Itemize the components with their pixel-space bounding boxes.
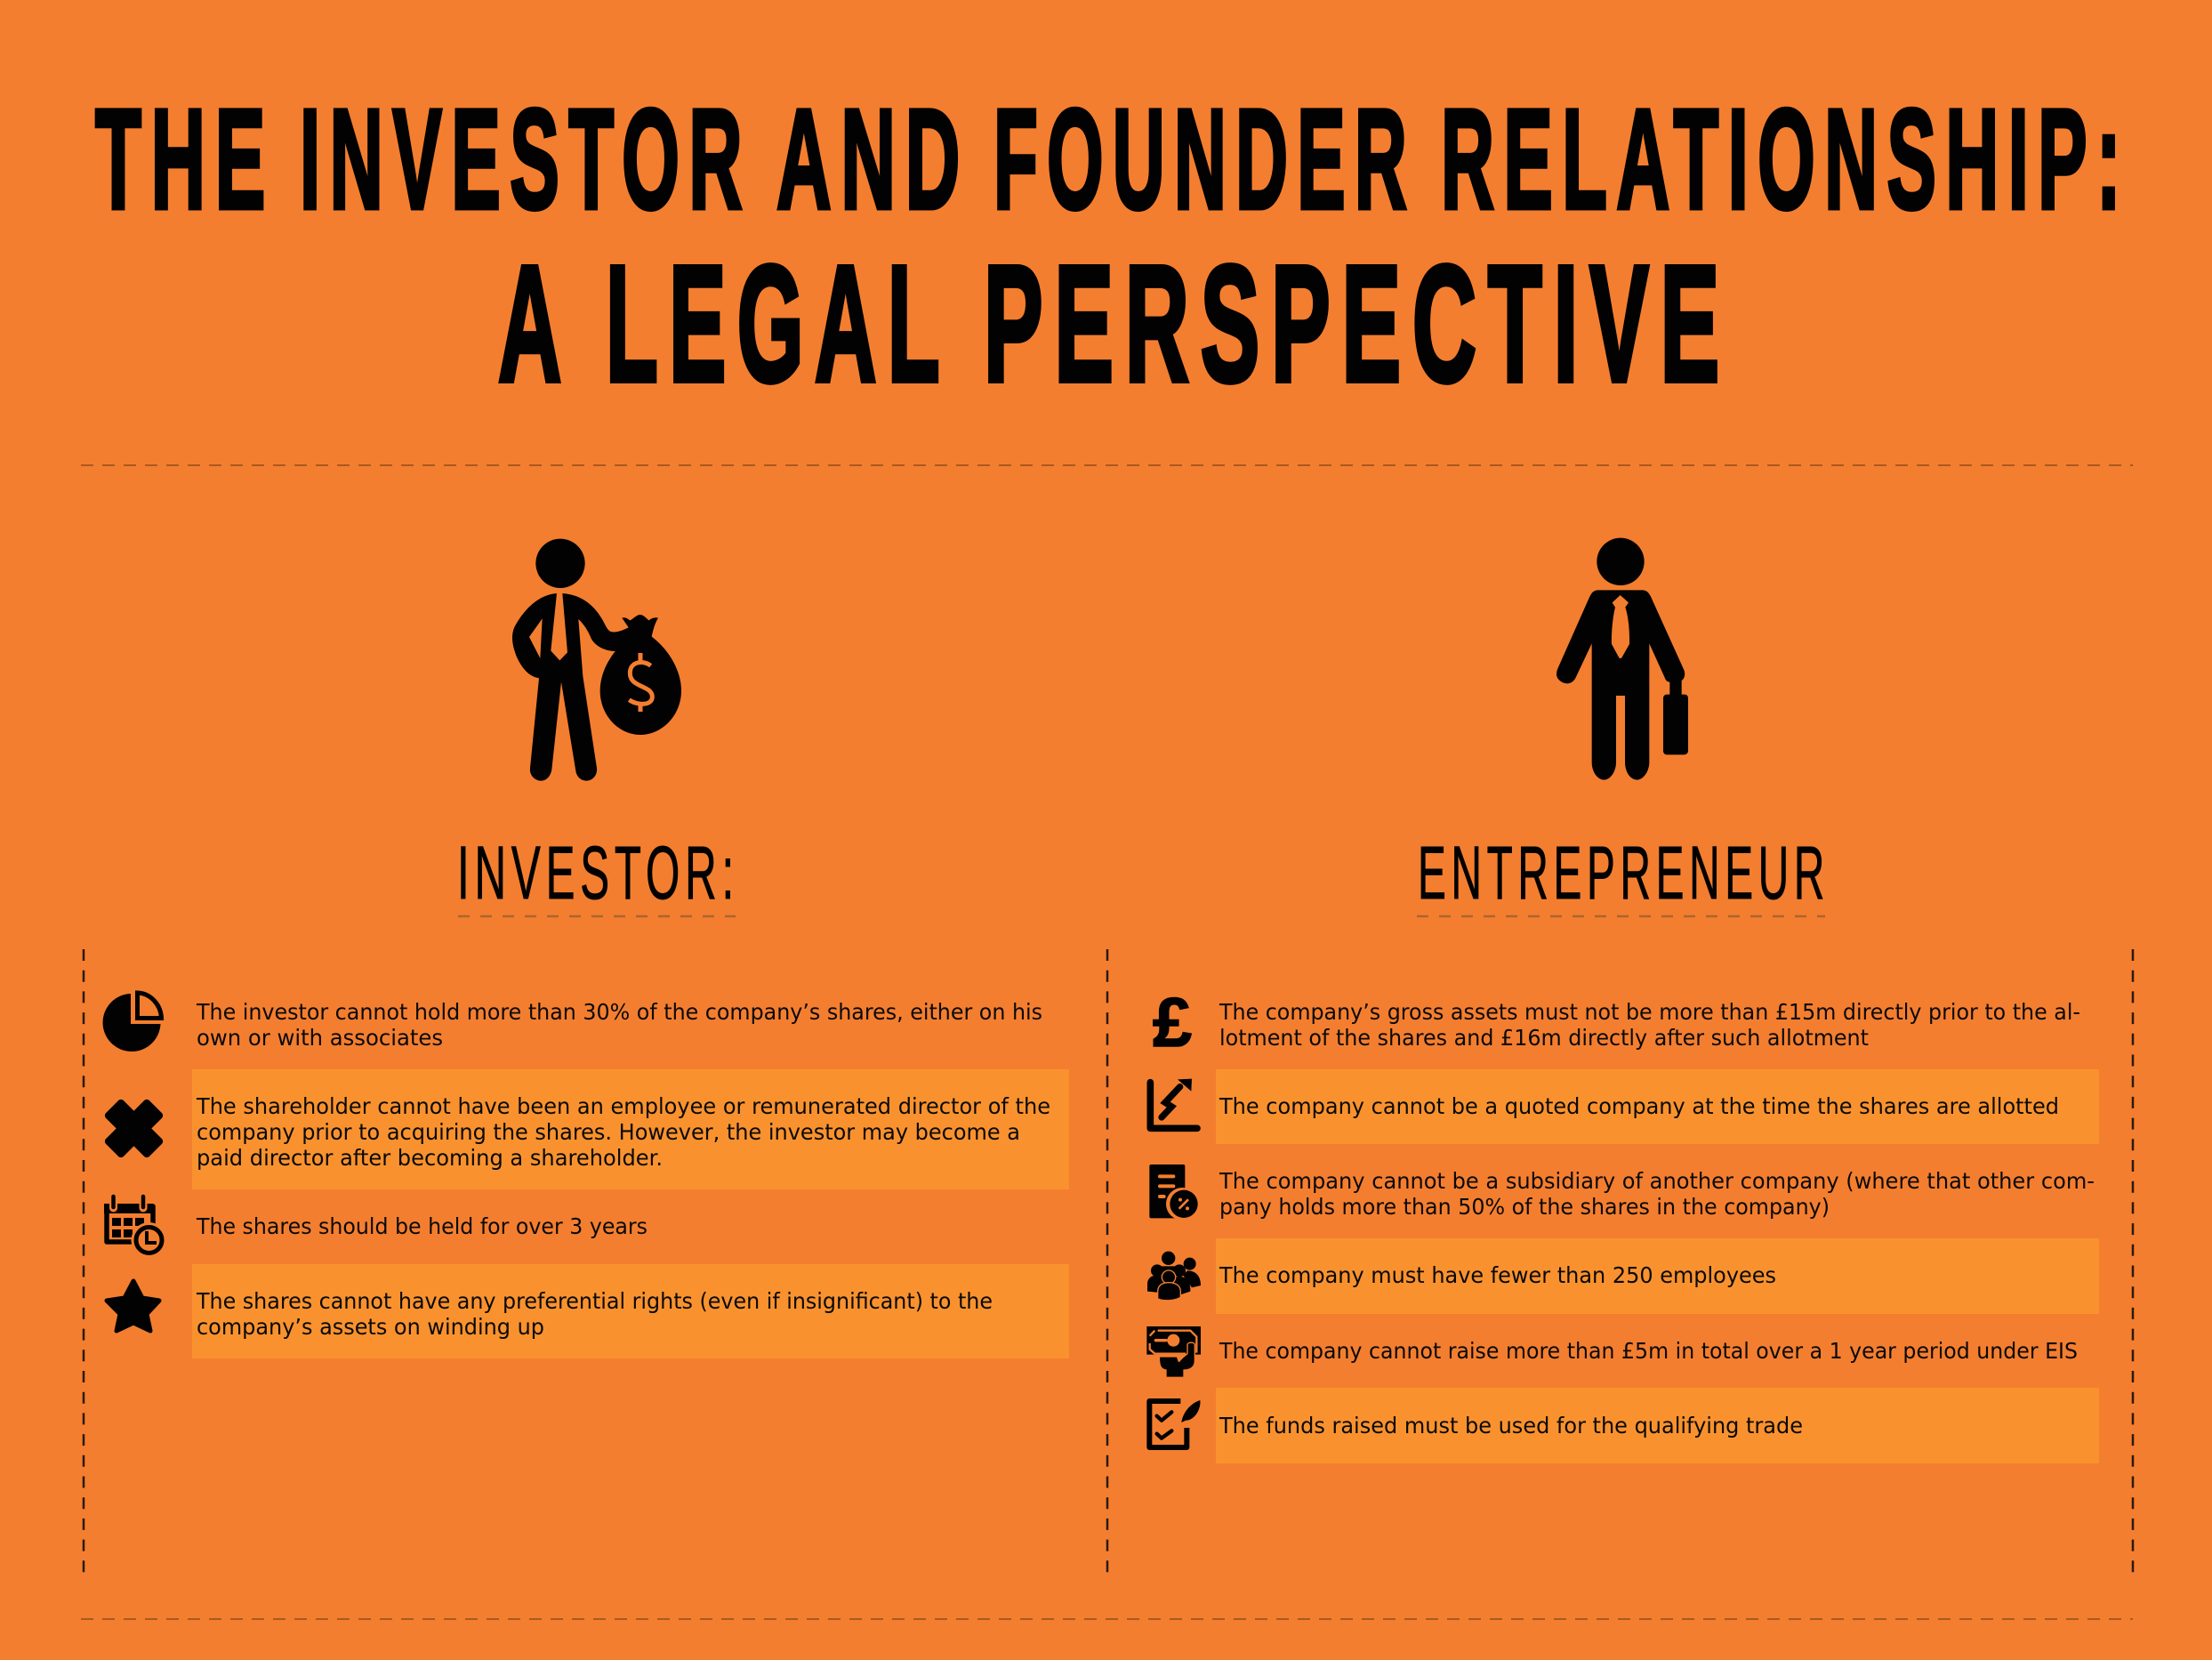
panel: investor conditions (103, 993, 1069, 1358)
title line 1: AND (776, 79, 969, 238)
text: entrepreneur row 6: The funds raised must be used for the qualifying trade (1219, 1413, 1803, 1438)
text: entrepreneur row 1: The company’s gross assets must not be more than £15m directly prior to the al- (1219, 999, 2080, 1025)
title line 2: A (498, 232, 573, 416)
text: investor row 2: The shareholder cannot have been an employee or remunerated director of the (196, 1093, 1050, 1119)
text: investor row 2: company prior to acquiring the shares. However, the investor may become a (197, 1119, 1020, 1145)
icon: investor with money bag (512, 539, 681, 781)
text: entrepreneur row 2: The company cannot be a quoted company at the time the shares are allotted (1219, 1093, 2059, 1119)
text: entrepreneur row 1 (1219, 999, 2080, 1051)
icon: calendar with clock (104, 1196, 167, 1258)
text: investor row 1: The investor cannot hold more than 30% of the company’s shares, either on his (196, 999, 1042, 1025)
text: investor row 4 (196, 1288, 993, 1340)
text: investor row 1 (196, 999, 1042, 1051)
title line 2: LEGAL (606, 232, 951, 416)
heading: entrepreneur: ENTREPRENEUR (1418, 831, 1830, 915)
text: investor row 4: The shares cannot have any preferential rights (even if insignificant) to the (196, 1288, 993, 1314)
icon: document with percent (1149, 1164, 1199, 1221)
title line 1 (95, 79, 2130, 238)
text: investor row 3: The shares should be held for over 3 years (196, 1213, 648, 1239)
title line 1: FOUNDER (993, 79, 1416, 238)
icon: group of people (1147, 1252, 1201, 1301)
highlight band: entrepreneur row 2 (1216, 1069, 2099, 1144)
icon: hand holding money (1146, 1326, 1201, 1377)
text: entrepreneur row 1: lotment of the shares and £16m directly after such allotment (1219, 1025, 1869, 1051)
text: investor row 2 (196, 1093, 1050, 1171)
highlight band: entrepreneur row 4 (1216, 1238, 2099, 1314)
heading: investor: INVESTOR: (457, 831, 739, 915)
text: investor row 2: paid director after becoming a shareholder. (197, 1145, 663, 1171)
icon: star (107, 1281, 159, 1331)
title (95, 79, 2130, 416)
highlight band: investor row 4 (192, 1264, 1069, 1358)
text: entrepreneur row 3: pany holds more than 50% of the shares in the company) (1219, 1194, 1830, 1220)
highlight band: entrepreneur row 6 (1216, 1388, 2099, 1463)
icon: cross (103, 1098, 165, 1159)
icon: entrepreneur with briefcase (1556, 538, 1688, 780)
icon: pound sign: £ (1153, 983, 1192, 1061)
text: investor row 1: own or with associates (197, 1025, 443, 1051)
text: investor row 4: company’s assets on winding up (197, 1314, 544, 1340)
icon: pie chart (103, 993, 162, 1052)
text: entrepreneur row 4: The company must have fewer than 250 employees (1219, 1262, 1776, 1288)
title line 1: INVESTOR (300, 79, 752, 238)
title line 1: THE (95, 79, 275, 238)
text: entrepreneur row 3 (1219, 1168, 2095, 1220)
text: entrepreneur row 3: The company cannot be a subsidiary of another company (where that other com- (1219, 1168, 2095, 1194)
icon: rising chart (1150, 1079, 1197, 1128)
highlight band: investor row 2 (192, 1069, 1069, 1189)
text: entrepreneur row 5: The company cannot raise more than £5m in total over a 1 year period under EIS (1219, 1338, 2078, 1364)
panel: entrepreneur conditions (1146, 983, 2099, 1463)
title line 2 (498, 232, 1731, 416)
icon: checklist with pen (1149, 1400, 1200, 1447)
